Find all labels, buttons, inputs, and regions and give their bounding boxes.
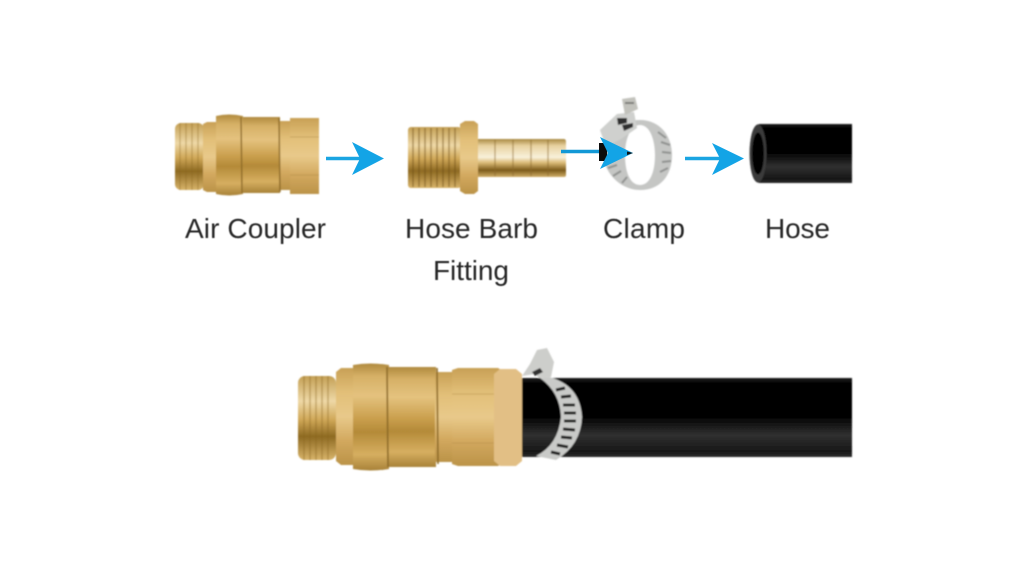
label: clamp: Clamp xyxy=(603,213,685,244)
label: hose barb fitting: Hose Barb xyxy=(405,213,538,244)
icon: hose barb fitting xyxy=(408,121,566,194)
icon: hose xyxy=(750,124,852,183)
hose, assembled xyxy=(520,378,852,457)
barb hex, assembled xyxy=(494,369,522,466)
clamp, assembled xyxy=(522,348,582,460)
label: hose: Hose xyxy=(765,213,830,244)
coupler body, assembled xyxy=(336,364,503,470)
label: air coupler: Air Coupler xyxy=(185,213,326,244)
icon: clamp xyxy=(600,97,672,190)
arrow: barb through clamp xyxy=(561,137,633,169)
label: hose barb fitting: Fitting xyxy=(433,255,509,286)
arrow: coupler to barb xyxy=(326,142,384,175)
arrow: clamp to hose xyxy=(685,143,744,175)
male thread, assembled xyxy=(298,376,336,460)
assembled fitting xyxy=(298,348,852,470)
icon: air coupler xyxy=(175,114,319,196)
label: hose barb fitting xyxy=(405,213,538,286)
